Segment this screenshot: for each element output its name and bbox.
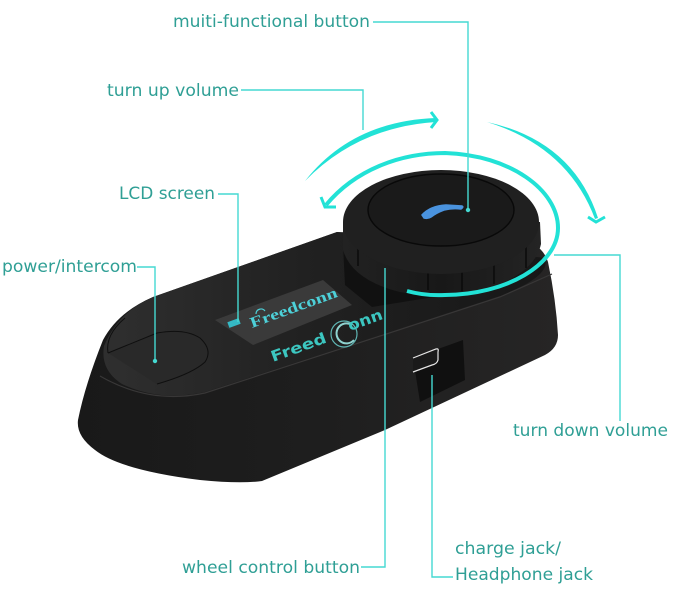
battery icon on screen xyxy=(227,318,241,328)
LCD screen xyxy=(215,280,352,345)
label: LCD screen: LCD screen xyxy=(119,184,215,203)
arrow: turn down volume xyxy=(487,122,605,222)
label: power/intercom: power/intercom xyxy=(2,257,137,276)
label: multi-functional button: muiti-functional button xyxy=(173,12,370,31)
printed Freedconn logo: Freed xyxy=(268,329,329,366)
knob inner disc xyxy=(368,174,514,246)
label: multi-functional button xyxy=(173,12,470,212)
label: turn down volume xyxy=(513,255,668,440)
device body xyxy=(78,232,558,482)
knob side xyxy=(343,222,541,295)
label: charge jack / headphone jack xyxy=(432,375,593,584)
body ledge highlight xyxy=(100,274,552,397)
arrow: wheel ring xyxy=(321,153,558,295)
screen headset icon xyxy=(256,309,265,314)
body side shell xyxy=(78,232,558,482)
label: turn up volume xyxy=(107,81,363,130)
icon: phone xyxy=(422,205,463,218)
label: wheel control button xyxy=(182,268,385,577)
arrow: turn up volume xyxy=(305,112,437,181)
label: turn down volume: turn down volume xyxy=(513,421,668,440)
charge jack recess xyxy=(413,340,465,402)
label: wheel control button: wheel control button xyxy=(182,558,360,577)
label: power/intercom xyxy=(2,257,157,363)
power button xyxy=(108,318,208,384)
label: LCD screen xyxy=(119,184,238,322)
label: charge jack / headphone jack: charge jack/ xyxy=(455,539,561,558)
knob top xyxy=(343,170,539,274)
label: turn up volume: turn up volume xyxy=(107,81,239,100)
label: charge jack / headphone jack: Headphone jack xyxy=(455,565,593,584)
printed Freedconn logo: onn xyxy=(345,306,385,335)
usb port xyxy=(413,349,438,372)
shadow under knob xyxy=(343,245,530,307)
wheel control knob xyxy=(343,170,541,295)
screen logo text: Freedconn xyxy=(248,285,341,332)
printed Freedconn logo xyxy=(268,306,385,366)
knob ribs xyxy=(358,240,526,291)
body top face xyxy=(103,232,546,396)
